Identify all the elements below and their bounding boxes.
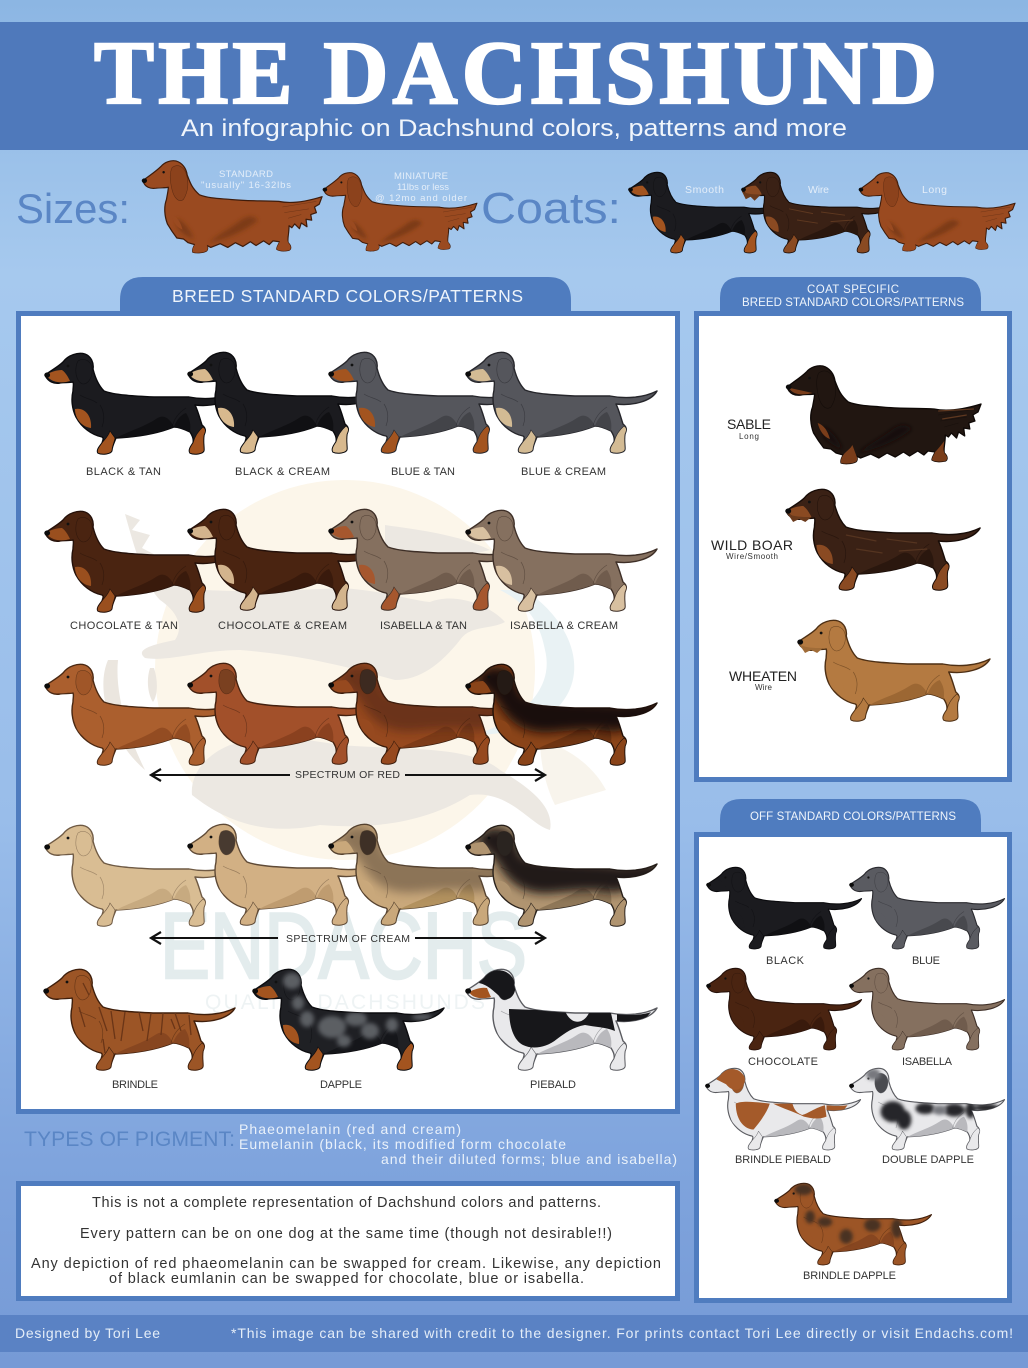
labels: chocolate and isabella: ISABELLA: [902, 1056, 953, 1068]
dog: wire coat: [741, 172, 898, 253]
labels: BLACK & TAN: [86, 466, 161, 478]
label: miniature: [375, 171, 467, 204]
dog: sable: [786, 366, 981, 464]
dog: standard: [142, 161, 322, 253]
label: wheaten: WHEATEN: [729, 668, 797, 684]
labels: [86, 466, 606, 478]
note text: [31, 1195, 661, 1287]
label: wheaten: [729, 668, 797, 692]
header band: [0, 22, 1028, 150]
labels: [70, 620, 618, 632]
label: spectrum of red: SPECTRUM OF RED: [295, 769, 400, 781]
dog: red two: [187, 663, 383, 764]
dog: smooth coat: [628, 172, 785, 253]
dog: brindle dapple: [774, 1183, 935, 1265]
note text: This is not a complete representation of Dachshund colors and patterns.: [92, 1195, 601, 1211]
note text: of black eumlanin can be swapped for chocolate, blue or isabella.: [109, 1271, 584, 1287]
footer band: [0, 1315, 1028, 1352]
dog: isabella: [849, 968, 1008, 1050]
label: sable: SABLE: [727, 416, 771, 432]
label: wild boar: [711, 537, 793, 561]
dog: long coat: [859, 173, 1015, 251]
labels: brindle piebald and double dapple: DOUBLE DAPPLE: [882, 1154, 974, 1166]
heading: coats: Coats:: [481, 184, 621, 233]
panel: off standard colors: [696, 799, 1010, 1300]
label: wild boar: WILD BOAR: [711, 537, 793, 553]
label: wheaten: Wire: [755, 683, 773, 692]
watermark text: Quality Dachshunds: QUALITY DACHSHUNDS: [205, 991, 485, 1014]
dog: black and cream: [187, 352, 383, 453]
sizes section: [16, 161, 477, 253]
labels: CHOCOLATE & TAN: [70, 620, 178, 632]
labels: chocolate and isabella: CHOCOLATE: [748, 1056, 818, 1068]
watermark logo: [103, 480, 606, 860]
arrow: spectrum of cream: [151, 932, 545, 944]
label: wild boar: Wire/Smooth: [726, 552, 778, 561]
dog: red one: [44, 664, 240, 765]
dog: cream one: [44, 825, 240, 926]
tab heading: BREED STANDARD COLORS/PATTERNS: [742, 297, 964, 309]
labels: PIEBALD: [530, 1079, 576, 1091]
dog: black: [706, 867, 865, 949]
panel: coat specific colors: [696, 277, 1010, 780]
row: spectrum of cream: [44, 824, 661, 945]
labels: ISABELLA & TAN: [380, 620, 467, 632]
labels: chocolate and isabella: [748, 1056, 953, 1068]
watermark text: Endachs: ENDACHS: [160, 893, 527, 998]
text: pigment descriptions: Eumelanin (black, its modified form chocolate: [239, 1136, 566, 1152]
heading: sizes: Sizes:: [16, 185, 130, 232]
dog: cream four: [465, 825, 661, 926]
dog: black and tan: [44, 353, 240, 454]
panel: note: [18, 1184, 678, 1298]
label: standard: "usually" 16-32lbs: [201, 180, 291, 191]
labels: black and blue: BLACK: [766, 955, 805, 967]
label: long: Long: [922, 184, 947, 196]
labels: brindle piebald and double dapple: [735, 1154, 974, 1166]
dog: chocolate: [706, 968, 865, 1050]
dog: wild boar: [785, 489, 984, 590]
dog: blue and tan: [328, 352, 524, 453]
labels: CHOCOLATE & CREAM: [218, 620, 347, 632]
labels: black and blue: [766, 955, 940, 967]
label: standard: STANDARD: [219, 169, 273, 180]
coats section: [481, 172, 1015, 253]
heading: types of pigment: TYPES OF PIGMENT:: [24, 1128, 235, 1151]
row: black and blue: [44, 352, 661, 478]
label: standard: [201, 169, 291, 191]
types of pigment: [24, 1121, 677, 1167]
tab heading: BREED STANDARD COLORS/PATTERNS: [172, 286, 523, 306]
dog: chocolate and cream: [187, 509, 383, 610]
labels: brindle piebald and double dapple: BRINDLE PIEBALD: [735, 1154, 831, 1166]
label: miniature: MINIATURE: [394, 171, 448, 182]
row: patterns: [43, 969, 661, 1091]
label: spectrum of cream: SPECTRUM OF CREAM: [286, 933, 410, 945]
text: pigment descriptions: [239, 1121, 677, 1167]
note text: Any depiction of red phaeomelanin can be swapped for cream. Likewise, any depiction: [31, 1256, 661, 1272]
label: smooth: Smooth: [685, 184, 724, 196]
labels: DAPPLE: [320, 1079, 362, 1091]
designer credit: Designed by Tori Lee: [15, 1325, 160, 1341]
dog: cream three: [328, 824, 524, 925]
dog: blue and cream: [465, 352, 661, 453]
labels: ISABELLA & CREAM: [510, 620, 618, 632]
label: sable: [727, 416, 771, 441]
dog: isabella and tan: [328, 509, 524, 610]
labels: [112, 1079, 576, 1091]
share notice: *This image can be shared with credit to the designer. For prints contact Tori Lee directly or visit Endachs.com!: [231, 1325, 1013, 1341]
dog: brindle piebald: [705, 1068, 864, 1150]
row: spectrum of red: [44, 663, 661, 781]
dog: chocolate and tan: [44, 511, 240, 612]
labels: BLUE & CREAM: [521, 466, 606, 478]
row: chocolate and isabella: [44, 509, 661, 632]
dog: dapple: [252, 969, 448, 1070]
tab heading: [120, 277, 571, 314]
label: miniature: 11lbs or less: [397, 182, 449, 193]
label: brindle dapple: BRINDLE DAPPLE: [803, 1270, 896, 1282]
note text: Every pattern can be on one dog at the same time (though not desirable!!): [80, 1226, 612, 1242]
label: sable: Long: [739, 432, 759, 441]
arrow: spectrum of red: [151, 769, 545, 781]
labels: BLACK & CREAM: [235, 466, 330, 478]
dog: brindle: [43, 969, 239, 1070]
dog: double dapple: [849, 1068, 1008, 1150]
dog: red three: [328, 663, 524, 764]
tab heading: [720, 277, 981, 314]
tab heading: COAT SPECIFIC: [807, 284, 899, 296]
labels: black and blue: BLUE: [912, 955, 940, 967]
text: pigment descriptions: and their diluted forms; blue and isabella): [381, 1151, 677, 1167]
title: THE DACHSHUND: [94, 24, 937, 123]
text: pigment descriptions: Phaeomelanin (red and cream): [239, 1121, 461, 1137]
tab heading: OFF STANDARD COLORS/PATTERNS: [750, 811, 956, 823]
dog: wheaten: [797, 620, 994, 721]
labels: BRINDLE: [112, 1079, 158, 1091]
labels: BLUE & TAN: [391, 466, 455, 478]
dog: miniature: [323, 173, 477, 251]
dog: red four: [465, 664, 661, 765]
dog: cream two: [187, 824, 383, 925]
dog: blue: [849, 867, 1008, 949]
subtitle: An infographic on Dachshund colors, patterns and more: [181, 115, 847, 142]
label: wire: Wire: [808, 184, 829, 196]
dog: piebald: [465, 969, 661, 1070]
dog: isabella and cream: [465, 510, 661, 611]
panel: breed standard colors and patterns: [18, 277, 678, 1112]
tab heading: [720, 799, 981, 836]
label: miniature: @ 12mo and older: [375, 193, 467, 204]
